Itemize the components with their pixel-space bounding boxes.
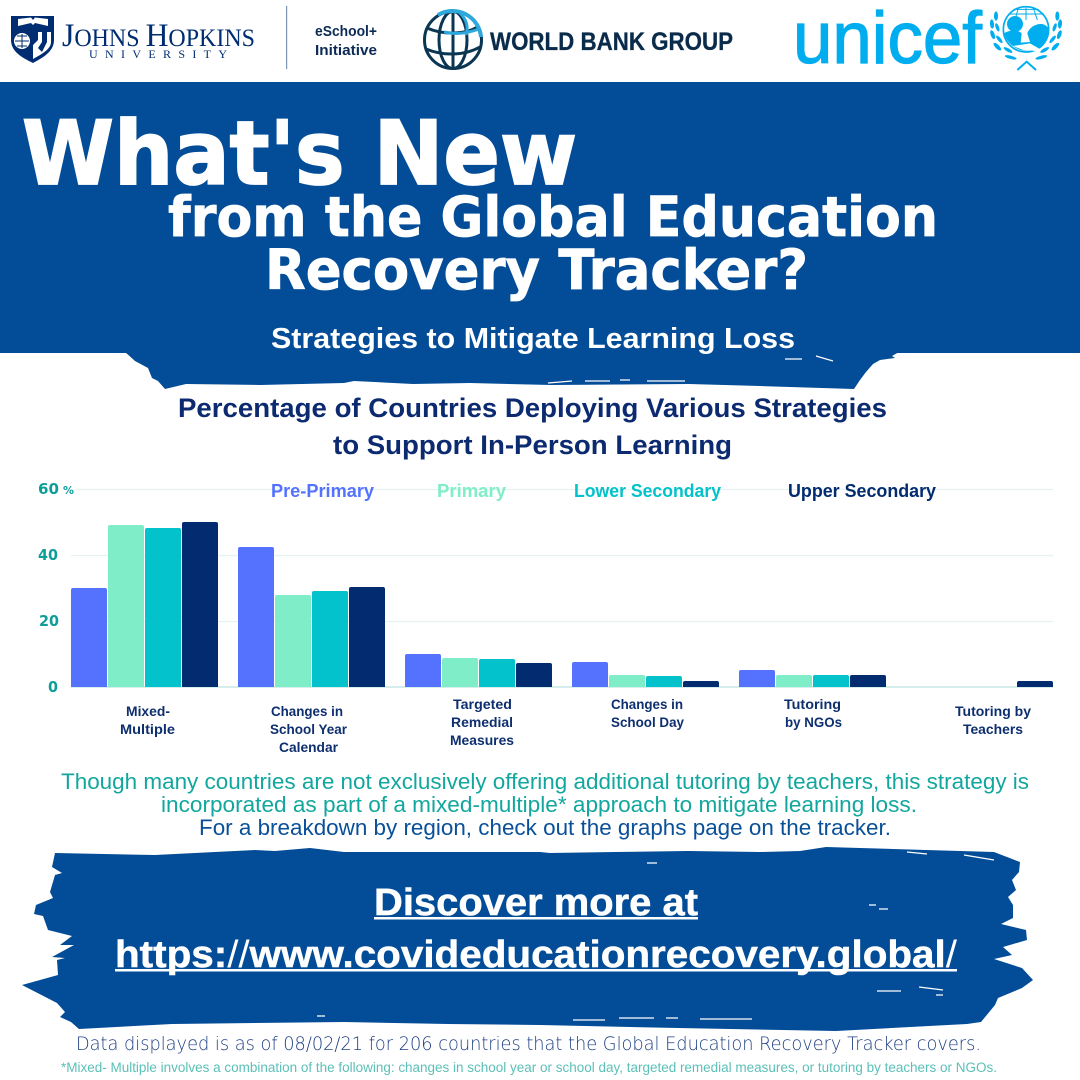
call to action brush panel [22,847,1033,1031]
category labels: Targeted [453,696,512,712]
legend: Upper Secondary [788,481,936,501]
category labels: Measures [450,732,514,748]
bars: Changes in School Day [572,662,719,687]
footnote: *Mixed- Multiple involves a combination of the following: changes in school year or school day, targeted remedial measures, or tutoring by teachers or NGOs. [61,1060,997,1075]
bars: Changes in School Year Calendar [238,547,385,687]
logo: eSchool+ Initiative: eSchool+ [315,24,377,40]
logo: eSchool+ Initiative [315,24,377,59]
y axis labels: % [63,485,74,497]
explanatory note [61,769,1029,840]
category labels: Mixed- [126,703,170,719]
category labels: Teachers [963,721,1023,737]
legend: Lower Secondary [574,481,721,501]
title: from the Global Education: from the Global Education [168,185,938,249]
call to action: URL: https://www.covideducationrecovery.global / [115,934,957,976]
y axis labels: 0 [48,678,58,696]
category labels: Changes in [611,696,683,712]
call to action: Discover more at: Discover more at [374,882,698,924]
legend: Pre-Primary [271,481,374,501]
data source note: Data displayed is as of 08/02/21 for 206 countries that the Global Education Recovery Tracker covers. [76,1033,981,1055]
bar chart [38,480,1053,755]
chart heading: Percentage of Countries Deploying Various Strategies [178,393,887,423]
category labels: School Year [270,721,348,737]
explanatory note: Though many countries are not exclusively offering additional tutoring by teachers, this strategy is [61,769,1029,794]
category labels: Tutoring by [955,703,1031,719]
legend: Primary [437,481,506,501]
explanatory note: incorporated as part of a mixed-multiple* approach to mitigate learning loss. [161,792,917,817]
category labels: Tutoring [784,696,841,712]
category labels: Remedial [451,714,513,730]
legend [271,481,936,501]
bars: Tutoring by NGOs [739,670,886,687]
logo: World Bank Group [424,11,733,69]
logo: eSchool+ Initiative: Initiative [315,43,377,59]
logo: Johns Hopkins University: UNIVERSITY [89,47,227,61]
chart heading [178,393,887,460]
chart heading: to Support In-Person Learning [333,430,732,460]
icon: UNICEF emblem [989,7,1063,70]
y axis labels: 40 [38,546,58,564]
bars: Mixed-Multiple [71,522,218,687]
category labels: Multiple [120,721,175,737]
logo: Johns Hopkins University [11,16,255,63]
header banner [0,82,1080,389]
subtitle: Strategies to Mitigate Learning Loss [271,323,795,355]
brush flecks [548,356,833,383]
explanatory note: For a breakdown by region, check out the graphs page on the tracker. [199,815,891,840]
category labels: Calendar [279,739,339,755]
category labels: by NGOs [785,714,842,730]
title: Recovery Tracker?: Recovery Tracker? [265,238,808,302]
logo: World Bank Group: WORLD BANK GROUP [490,28,733,56]
brush stroke under banner [125,352,899,389]
bars: Tutoring by Teachers [1017,681,1053,687]
y axis labels [38,480,74,696]
title: What's New: What's New [22,102,577,205]
logo header [11,0,1063,79]
category labels: School Day [611,714,684,730]
divider [286,6,287,69]
logo: Johns Hopkins University: JOHNS HOPKINS [62,18,255,54]
category labels: Changes in [271,703,343,719]
bars: Targeted Remedial Measures [405,654,552,687]
brush flecks [317,852,994,1020]
category labels [120,696,1031,755]
y axis labels: 20 [39,612,59,630]
logo: UNICEF: unicef [793,0,983,79]
y axis labels: 60 [38,480,59,498]
